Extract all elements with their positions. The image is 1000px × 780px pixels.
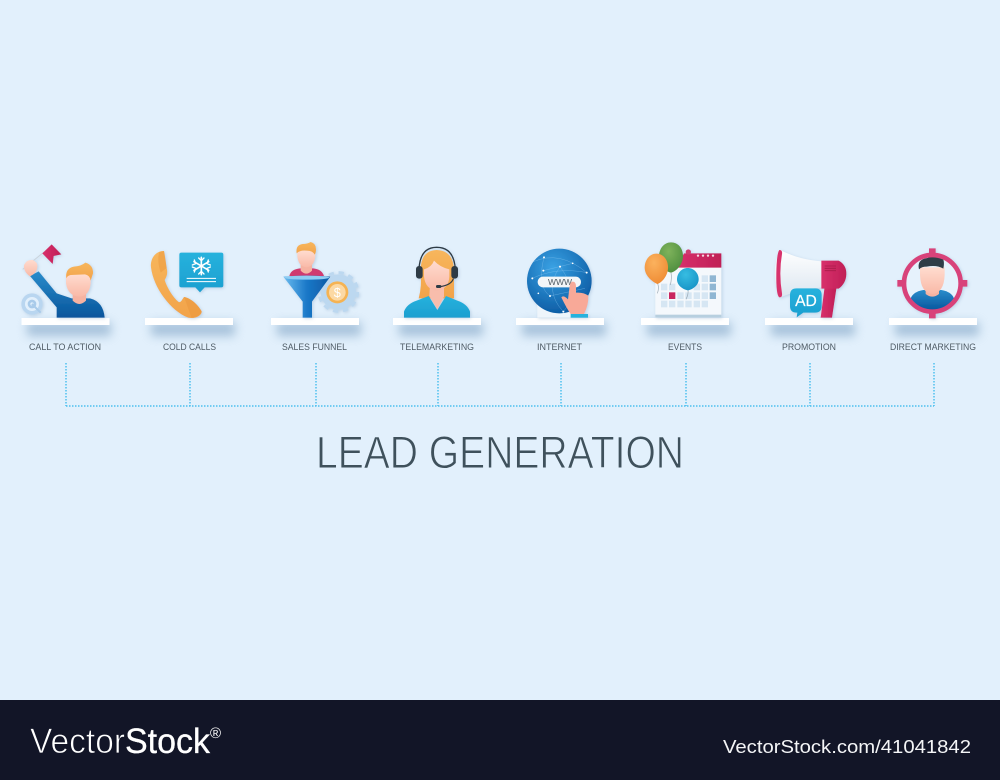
footer bar (0, 700, 1000, 780)
label: TELEMARKETING (400, 342, 474, 352)
item: sales funnel (271, 242, 361, 352)
cuff (571, 314, 588, 318)
shelf (145, 318, 235, 336)
item: internet (516, 249, 606, 352)
hand (24, 260, 37, 276)
stand (537, 305, 571, 318)
handset shading (158, 251, 202, 317)
handle (821, 287, 837, 318)
icon: calendar and balloons (645, 242, 721, 317)
neck (73, 290, 86, 304)
icon: operator with headset (404, 247, 470, 318)
coin: $ (334, 286, 341, 300)
shelf (22, 318, 111, 336)
target (21, 293, 43, 315)
hair (66, 263, 93, 281)
label: COLD CALLS (163, 342, 216, 352)
shelf (393, 318, 483, 336)
globe (527, 249, 592, 313)
handset (151, 251, 202, 318)
person (289, 242, 324, 276)
dotted connector (66, 363, 934, 406)
shelf (516, 318, 606, 336)
label: EVENTS (668, 342, 702, 352)
logo: ® (210, 725, 221, 742)
face (920, 267, 945, 294)
image id: VectorStock.com/41041842 (723, 736, 971, 757)
face (424, 261, 449, 291)
body (404, 296, 470, 318)
label: SALES FUNNEL (282, 342, 347, 352)
calendar header (677, 249, 721, 268)
flag (23, 244, 61, 269)
item: call to action (21, 244, 111, 352)
title: LEAD GENERATION (316, 427, 684, 478)
raised arm and torso (30, 271, 105, 318)
date grid (661, 275, 716, 307)
icon: telephone and chat (151, 251, 223, 318)
item: cold calls (145, 251, 235, 352)
blue balloon (677, 268, 699, 290)
crosshair ring (897, 248, 967, 318)
megaphone body (821, 261, 846, 289)
ring outline (904, 255, 961, 312)
speech bubble (179, 253, 223, 292)
label: INTERNET (537, 342, 583, 352)
icon: person raising flag (21, 244, 105, 318)
hair (919, 255, 944, 269)
network dots (531, 256, 588, 313)
logo: Vector (30, 722, 125, 761)
snowflake (192, 257, 210, 275)
face (66, 274, 91, 297)
shelf (889, 318, 979, 336)
funnel (283, 276, 330, 318)
item: events (641, 242, 731, 352)
long hair (419, 250, 454, 298)
horn (775, 250, 822, 297)
shelf (641, 318, 731, 336)
address bar: WWW (548, 277, 573, 287)
text lines (187, 278, 216, 282)
label: DIRECT MARKETING (890, 342, 976, 352)
icon: person in crosshair (897, 248, 967, 318)
neck (926, 287, 939, 297)
body (911, 290, 954, 311)
shelf (765, 318, 855, 336)
item: promotion (765, 250, 855, 352)
label: PROMOTION (782, 342, 836, 352)
horn rim (776, 250, 782, 297)
logo: Stock (125, 722, 210, 761)
orange balloon (645, 254, 668, 284)
item: direct marketing (889, 248, 979, 352)
logo (30, 722, 221, 761)
hand (561, 282, 588, 314)
AD bubble: AD (795, 293, 817, 310)
neck (429, 285, 444, 309)
calendar page (655, 263, 721, 317)
item: telemarketing (393, 247, 483, 352)
label: CALL TO ACTION (29, 342, 101, 352)
gear (319, 273, 358, 311)
headset (416, 247, 458, 288)
balloon strings (657, 273, 688, 299)
network lines (532, 257, 587, 312)
grille (825, 266, 836, 271)
green balloon (659, 242, 683, 273)
shelf (271, 318, 361, 336)
